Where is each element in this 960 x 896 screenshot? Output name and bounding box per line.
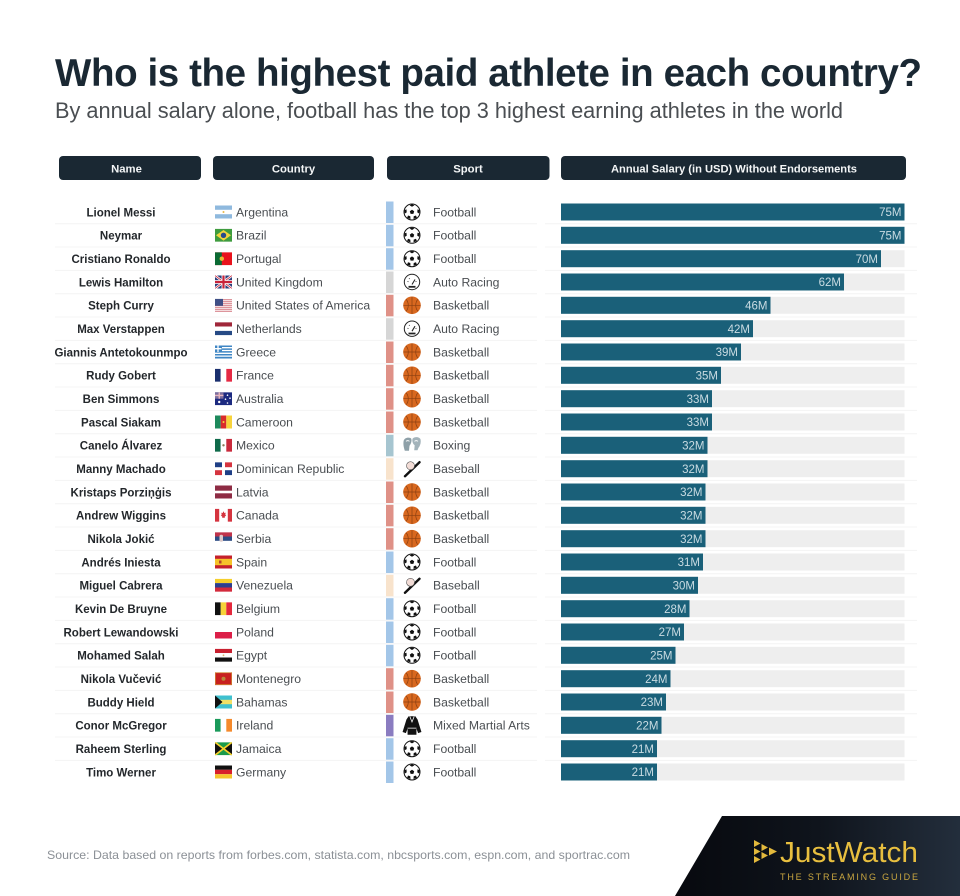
row: Andrew Wiggins: 32M: [680, 510, 702, 522]
row: Raheem Sterling: 21M: [632, 744, 654, 756]
row: Canelo Álvarez: Boxing: [433, 439, 470, 453]
row: Giannis Antetokounmpo: [54, 342, 917, 364]
row: Miguel Cabrera: 30M: [673, 580, 695, 592]
row: Kristaps Porziņģis: Basketball: [433, 485, 489, 499]
row: Max Verstappen: [55, 318, 917, 340]
row: Pascal Siakam: [55, 412, 917, 434]
row: Lionel Messi: Argentina: [236, 205, 288, 219]
row: Raheem Sterling: [55, 738, 917, 760]
row: Miguel Cabrera: Venezuela: [236, 579, 293, 593]
row: Giannis Antetokounmpo: Giannis Antetokounmpo: [54, 347, 188, 359]
row: Nikola Jokić: Serbia: [236, 532, 271, 546]
row: Buddy Hield: [55, 692, 917, 714]
row: Cristiano Ronaldo: [55, 248, 917, 270]
row: Miguel Cabrera: Miguel Cabrera: [79, 581, 163, 593]
row: Nikola Vučević: Montenegro: [236, 672, 301, 686]
subtitle: By annual salary alone, football has the top 3 highest earning athletes in the world: [55, 98, 843, 123]
row: Raheem Sterling: Raheem Sterling: [76, 744, 166, 756]
row: Andrew Wiggins: [55, 505, 917, 527]
row: Manny Machado: 32M: [682, 464, 704, 476]
row: Max Verstappen: Netherlands: [236, 322, 302, 336]
row: Andrés Iniesta: Football: [433, 555, 476, 569]
row: Lewis Hamilton: [55, 272, 917, 294]
row: Robert Lewandowski: [55, 622, 917, 644]
row: Raheem Sterling: Football: [433, 742, 476, 756]
row: Canelo Álvarez: Canelo Álvarez: [80, 440, 162, 453]
row: Buddy Hield: 23M: [641, 697, 663, 709]
row: Andrés Iniesta: Andrés Iniesta: [81, 557, 161, 569]
row: Canelo Álvarez: [55, 435, 917, 457]
row: Kevin De Bruyne: 28M: [664, 604, 686, 616]
row: Timo Werner: [86, 762, 904, 783]
row: Manny Machado: Baseball: [433, 462, 480, 476]
row: Kristaps Porziņģis: Kristaps Porziņģis: [71, 486, 171, 499]
row: Buddy Hield: Buddy Hield: [87, 697, 155, 709]
row: Andrés Iniesta: 31M: [678, 557, 700, 569]
header: sport: Sport: [453, 164, 483, 176]
row: Timo Werner: Football: [433, 765, 476, 779]
row: Giannis Antetokounmpo: Greece: [236, 345, 276, 359]
row: Raheem Sterling: Jamaica: [236, 742, 282, 756]
row: Conor McGregor: Mixed Martial Arts: [433, 719, 530, 733]
row: Andrew Wiggins: Canada: [236, 509, 279, 523]
row: Max Verstappen: Max Verstappen: [77, 324, 165, 336]
row: Conor McGregor: 22M: [636, 720, 658, 732]
row: Pascal Siakam: 33M: [687, 417, 709, 429]
row: Kevin De Bruyne: Football: [433, 602, 476, 616]
row: Cristiano Ronaldo: Football: [433, 252, 476, 266]
row: Conor McGregor: Conor McGregor: [75, 721, 167, 733]
row: Manny Machado: Manny Machado: [76, 464, 166, 476]
panel: JustWatch logo footer: [675, 816, 960, 896]
header: country: Country: [272, 164, 316, 176]
row: Lionel Messi: Football: [433, 205, 476, 219]
row: Lewis Hamilton: Auto Racing: [433, 275, 499, 289]
header: country: [213, 156, 374, 180]
row: Rudy Gobert: 35M: [696, 370, 718, 382]
header: name: [59, 156, 201, 180]
row: Cristiano Ronaldo: Cristiano Ronaldo: [71, 254, 171, 266]
row: Timo Werner: Timo Werner: [86, 767, 156, 779]
row: Kristaps Porziņģis: Latvia: [236, 485, 269, 499]
row: Pascal Siakam: Cameroon: [236, 415, 293, 429]
row: Timo Werner: Germany: [236, 765, 287, 779]
row: Canelo Álvarez: 32M: [682, 440, 704, 452]
row: Kevin De Bruyne: [55, 598, 917, 620]
row: Nikola Vučević: [55, 668, 917, 690]
row: Andrew Wiggins: Andrew Wiggins: [76, 511, 166, 523]
row: Nikola Vučević: 24M: [645, 674, 668, 686]
row: Robert Lewandowski: 27M: [659, 627, 681, 639]
row: Rudy Gobert: Basketball: [433, 369, 489, 383]
row: Neymar: Football: [433, 229, 476, 243]
row: Steph Curry: Steph Curry: [88, 301, 155, 313]
row: Neymar: Brazil: [236, 229, 266, 243]
row: Rudy Gobert: [55, 365, 917, 387]
row: Manny Machado: Dominican Republic: [236, 462, 344, 476]
header: sport: [387, 156, 550, 180]
table header: [59, 156, 906, 180]
row: Neymar: 75M: [879, 231, 902, 243]
row: Nikola Jokić: Basketball: [433, 532, 489, 546]
row: Steph Curry: Basketball: [433, 299, 489, 313]
row: Neymar: [55, 225, 917, 247]
icon: play triangle logo: [754, 840, 777, 863]
row: Rudy Gobert: France: [236, 369, 274, 383]
row: Buddy Hield: Bahamas: [236, 695, 288, 709]
row: Conor McGregor: [55, 715, 917, 737]
row: Miguel Cabrera: [55, 575, 917, 597]
row: Nikola Jokić: [55, 528, 917, 550]
row: Lewis Hamilton: United Kingdom: [236, 275, 323, 289]
row: Buddy Hield: Basketball: [433, 695, 489, 709]
logo wordmark: JustWatch: [780, 837, 918, 869]
row: Ben Simmons: Basketball: [433, 392, 489, 406]
row: Robert Lewandowski: Robert Lewandowski: [63, 627, 179, 639]
row: Kristaps Porziņģis: [55, 482, 917, 504]
row: Lewis Hamilton: 62M: [819, 277, 841, 289]
row: Cristiano Ronaldo: Portugal: [236, 252, 281, 266]
row: Manny Machado: [55, 458, 917, 480]
row: Pascal Siakam: Pascal Siakam: [81, 417, 161, 429]
row: Miguel Cabrera: Baseball: [433, 579, 480, 593]
row: Nikola Jokić: Nikola Jokić: [87, 534, 155, 546]
header: annual salary: [561, 156, 906, 180]
row: Andrés Iniesta: [55, 552, 917, 574]
row: Giannis Antetokounmpo: 39M: [716, 347, 738, 359]
row: Ben Simmons: Australia: [236, 392, 284, 406]
row: Ben Simmons: Ben Simmons: [83, 394, 159, 406]
row: Giannis Antetokounmpo: Basketball: [433, 345, 489, 359]
logo tagline: THE STREAMING GUIDE: [780, 872, 918, 882]
row: Mohamed Salah: 25M: [650, 650, 672, 662]
row: Lionel Messi: [55, 202, 917, 224]
row: Lewis Hamilton: Lewis Hamilton: [79, 277, 163, 289]
row: Andrés Iniesta: Spain: [236, 555, 267, 569]
row: Robert Lewandowski: Poland: [236, 625, 274, 639]
row: Max Verstappen: 42M: [728, 324, 750, 336]
row: Andrew Wiggins: Basketball: [433, 509, 489, 523]
row: Timo Werner: 21M: [632, 767, 654, 779]
row: Ben Simmons: 33M: [687, 394, 709, 406]
row: Neymar: Neymar: [100, 231, 143, 243]
row: Steph Curry: [55, 295, 917, 317]
row: Kevin De Bruyne: Kevin De Bruyne: [75, 604, 167, 616]
row: Lionel Messi: 75M: [879, 207, 902, 219]
row: Mohamed Salah: Mohamed Salah: [77, 651, 165, 663]
row: Max Verstappen: Auto Racing: [433, 322, 499, 336]
row: Cristiano Ronaldo: 70M: [856, 254, 878, 266]
row: Steph Curry: 46M: [745, 300, 768, 312]
row: Mohamed Salah: Football: [433, 649, 476, 663]
row: Mohamed Salah: Egypt: [236, 649, 268, 663]
row: Steph Curry: United States of America: [236, 299, 370, 313]
row: Mohamed Salah: [55, 645, 917, 667]
row: Conor McGregor: Ireland: [236, 719, 273, 733]
title: Who is the highest paid athlete in each country?: [55, 52, 922, 95]
row: Ben Simmons: [55, 388, 917, 410]
row: Pascal Siakam: Basketball: [433, 415, 489, 429]
header: name: Name: [111, 164, 142, 176]
row: Nikola Jokić: 32M: [680, 534, 702, 546]
source note: Source: Data based on reports from forbes.com, statista.com, nbcsports.com, espn.com, and sportrac.com: [47, 848, 630, 862]
header: annual salary: Annual Salary (in USD) Without Endorsements: [611, 164, 857, 176]
row: Robert Lewandowski: Football: [433, 625, 476, 639]
row: Rudy Gobert: Rudy Gobert: [86, 371, 156, 383]
row: Canelo Álvarez: Mexico: [236, 439, 275, 453]
row: Nikola Vučević: Nikola Vučević: [81, 674, 162, 686]
row: Kristaps Porziņģis: 32M: [680, 487, 702, 499]
row: Nikola Vučević: Basketball: [433, 672, 489, 686]
row: Lionel Messi: Lionel Messi: [86, 207, 156, 219]
row: Kevin De Bruyne: Belgium: [236, 602, 280, 616]
